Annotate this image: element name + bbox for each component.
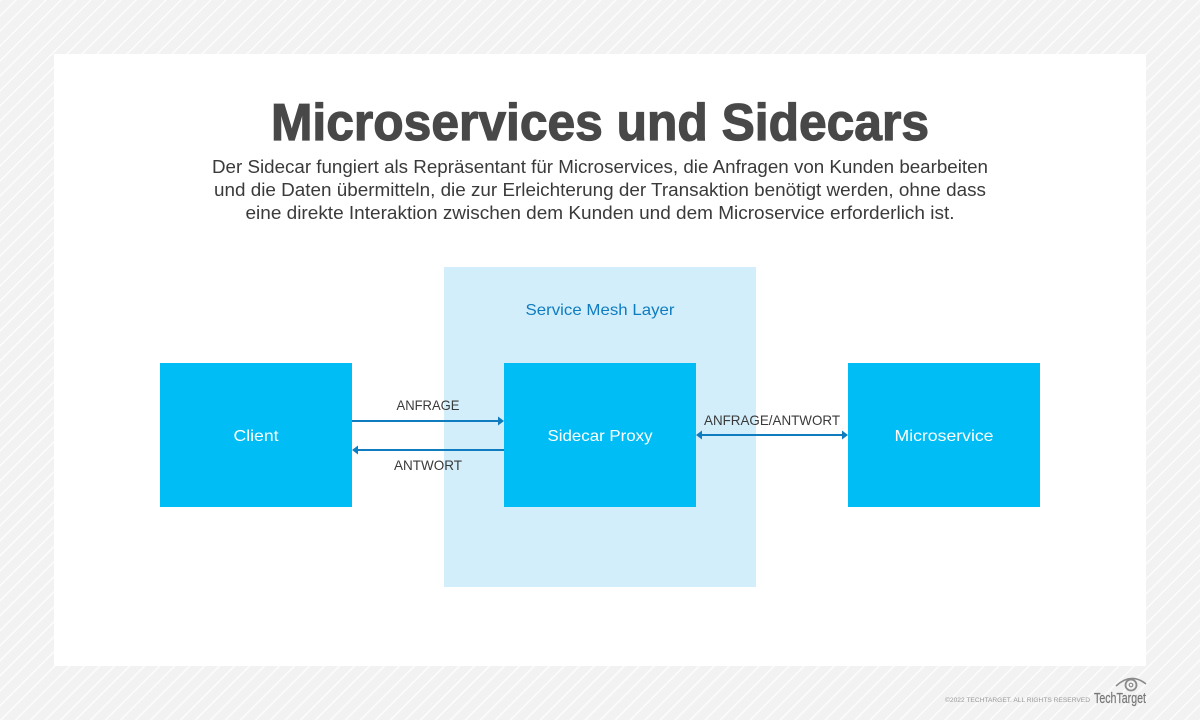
- panel: service mesh layer: [444, 267, 756, 587]
- heading: service mesh layer: Service Mesh Layer: [526, 302, 675, 319]
- label: anfrage/antwort: ANFRAGE/ANTWORT: [704, 412, 840, 428]
- box: client: Client: [234, 428, 279, 445]
- logo: techtarget: TechTarget: [1094, 691, 1146, 707]
- box: microservice: Microservice: [894, 428, 994, 445]
- text block: description: [212, 157, 988, 223]
- arrow: request from client to sidecar: [352, 416, 504, 426]
- text block: description: eine direkte Interaktion zwischen dem Kunden und dem Microservice erforderlich ist.: [246, 203, 954, 223]
- label: anfrage: ANFRAGE: [396, 397, 460, 413]
- copyright: ©2022 TECHTARGET. ALL RIGHTS RESERVED: [945, 696, 1090, 704]
- arrow: response from sidecar to client: [352, 446, 504, 454]
- box: sidecar proxy: [504, 363, 696, 507]
- arrow: bidirectional sidecar and microservice: [696, 430, 848, 440]
- box: sidecar proxy: Sidecar Proxy: [548, 428, 652, 445]
- icon: eye: [1116, 678, 1146, 690]
- text block: description: Der Sidecar fungiert als Repräsentant für Microservices, die Anfragen von Kunden bearbeiten: [212, 157, 988, 177]
- box: microservice: [848, 363, 1040, 507]
- label: antwort: ANTWORT: [394, 457, 462, 473]
- title: Microservices und Sidecars: [271, 94, 929, 152]
- panel: white card: [54, 54, 1146, 666]
- logo: techtarget: [1094, 678, 1146, 707]
- text block: description: und die Daten übermitteln, die zur Erleichterung der Transaktion benötigt werden, ohne dass: [214, 180, 986, 200]
- box: client: [160, 363, 352, 507]
